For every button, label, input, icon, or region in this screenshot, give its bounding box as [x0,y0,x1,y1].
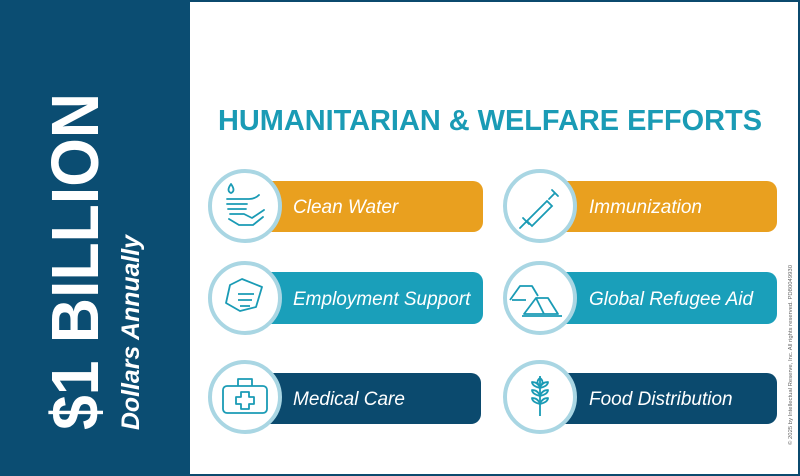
item: Medical Care [210,362,481,432]
item: Clean Water: Clean Water [293,197,399,218]
copyright note: © 2025 by Intellectual Reserve, Inc. All rights reserved. PD80049930 [787,265,794,445]
item: Employment Support: Employment Support [293,289,471,310]
item: Medical Care: Medical Care [293,389,405,410]
item: Global Refugee Aid: Global Refugee Aid [589,289,755,310]
panel: left stat [0,0,190,476]
item: Employment Support [210,263,483,333]
icon: tents [510,286,562,316]
item: Clean Water [210,171,483,241]
item: Immunization [505,171,777,241]
icon: hands and water drop [227,184,264,225]
icon: handshake fist [226,279,262,311]
icon: syringe [520,190,558,228]
icon: medical kit [223,379,267,413]
icon: wheat [532,376,548,416]
item: Immunization: Immunization [589,197,702,218]
stat: $1 BILLION: $1 BILLION [38,93,113,430]
item: Food Distribution: Food Distribution [589,389,733,410]
item: Global Refugee Aid [505,263,777,333]
subtitle: Dollars Annually: Dollars Annually [117,234,145,430]
title: HUMANITARIAN & WELFARE EFFORTS [218,105,762,137]
item: Food Distribution [505,362,777,432]
